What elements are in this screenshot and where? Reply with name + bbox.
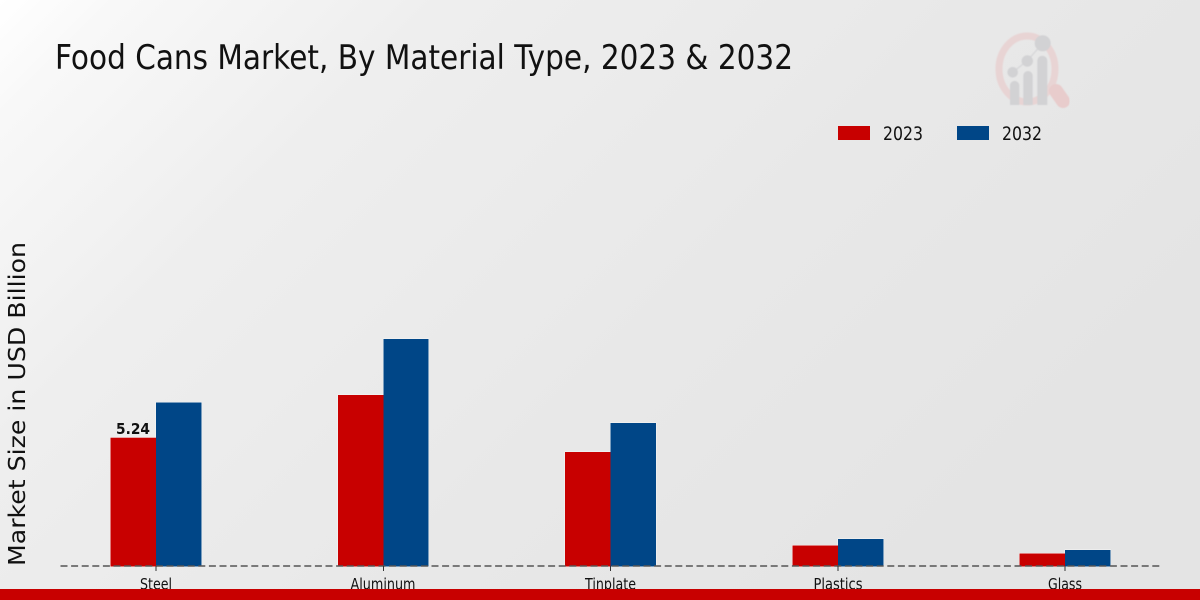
title: Food Cans Market, By Material Type, 2023 & 2032	[55, 38, 793, 78]
legend item: 2023	[838, 123, 923, 145]
legend item: 2023: 2023	[883, 123, 923, 145]
bars: Tinplate	[564, 422, 656, 567]
value label: 5.24: 5.24	[116, 420, 150, 438]
legend	[838, 123, 1042, 145]
bar chart	[60, 338, 1160, 594]
legend item: 2032: 2032	[1002, 123, 1042, 145]
bars: Plastics	[792, 538, 884, 567]
x axis labels: Tinplate	[584, 574, 636, 594]
x axis labels	[140, 574, 1082, 594]
x axis labels: Aluminum	[350, 574, 416, 594]
x axis labels: Steel	[140, 574, 172, 594]
x axis labels: Glass	[1048, 574, 1082, 594]
bars: Glass	[1019, 550, 1111, 567]
icon: watermark logo magnifier with bars	[999, 35, 1063, 105]
footer band	[0, 589, 1200, 600]
x axis labels: Plastics	[814, 574, 862, 594]
y axis label: Market Size in USD Billion	[5, 242, 31, 566]
bars: Steel	[110, 402, 202, 567]
legend item: 2032	[957, 123, 1042, 145]
bars: Aluminum	[338, 338, 429, 567]
